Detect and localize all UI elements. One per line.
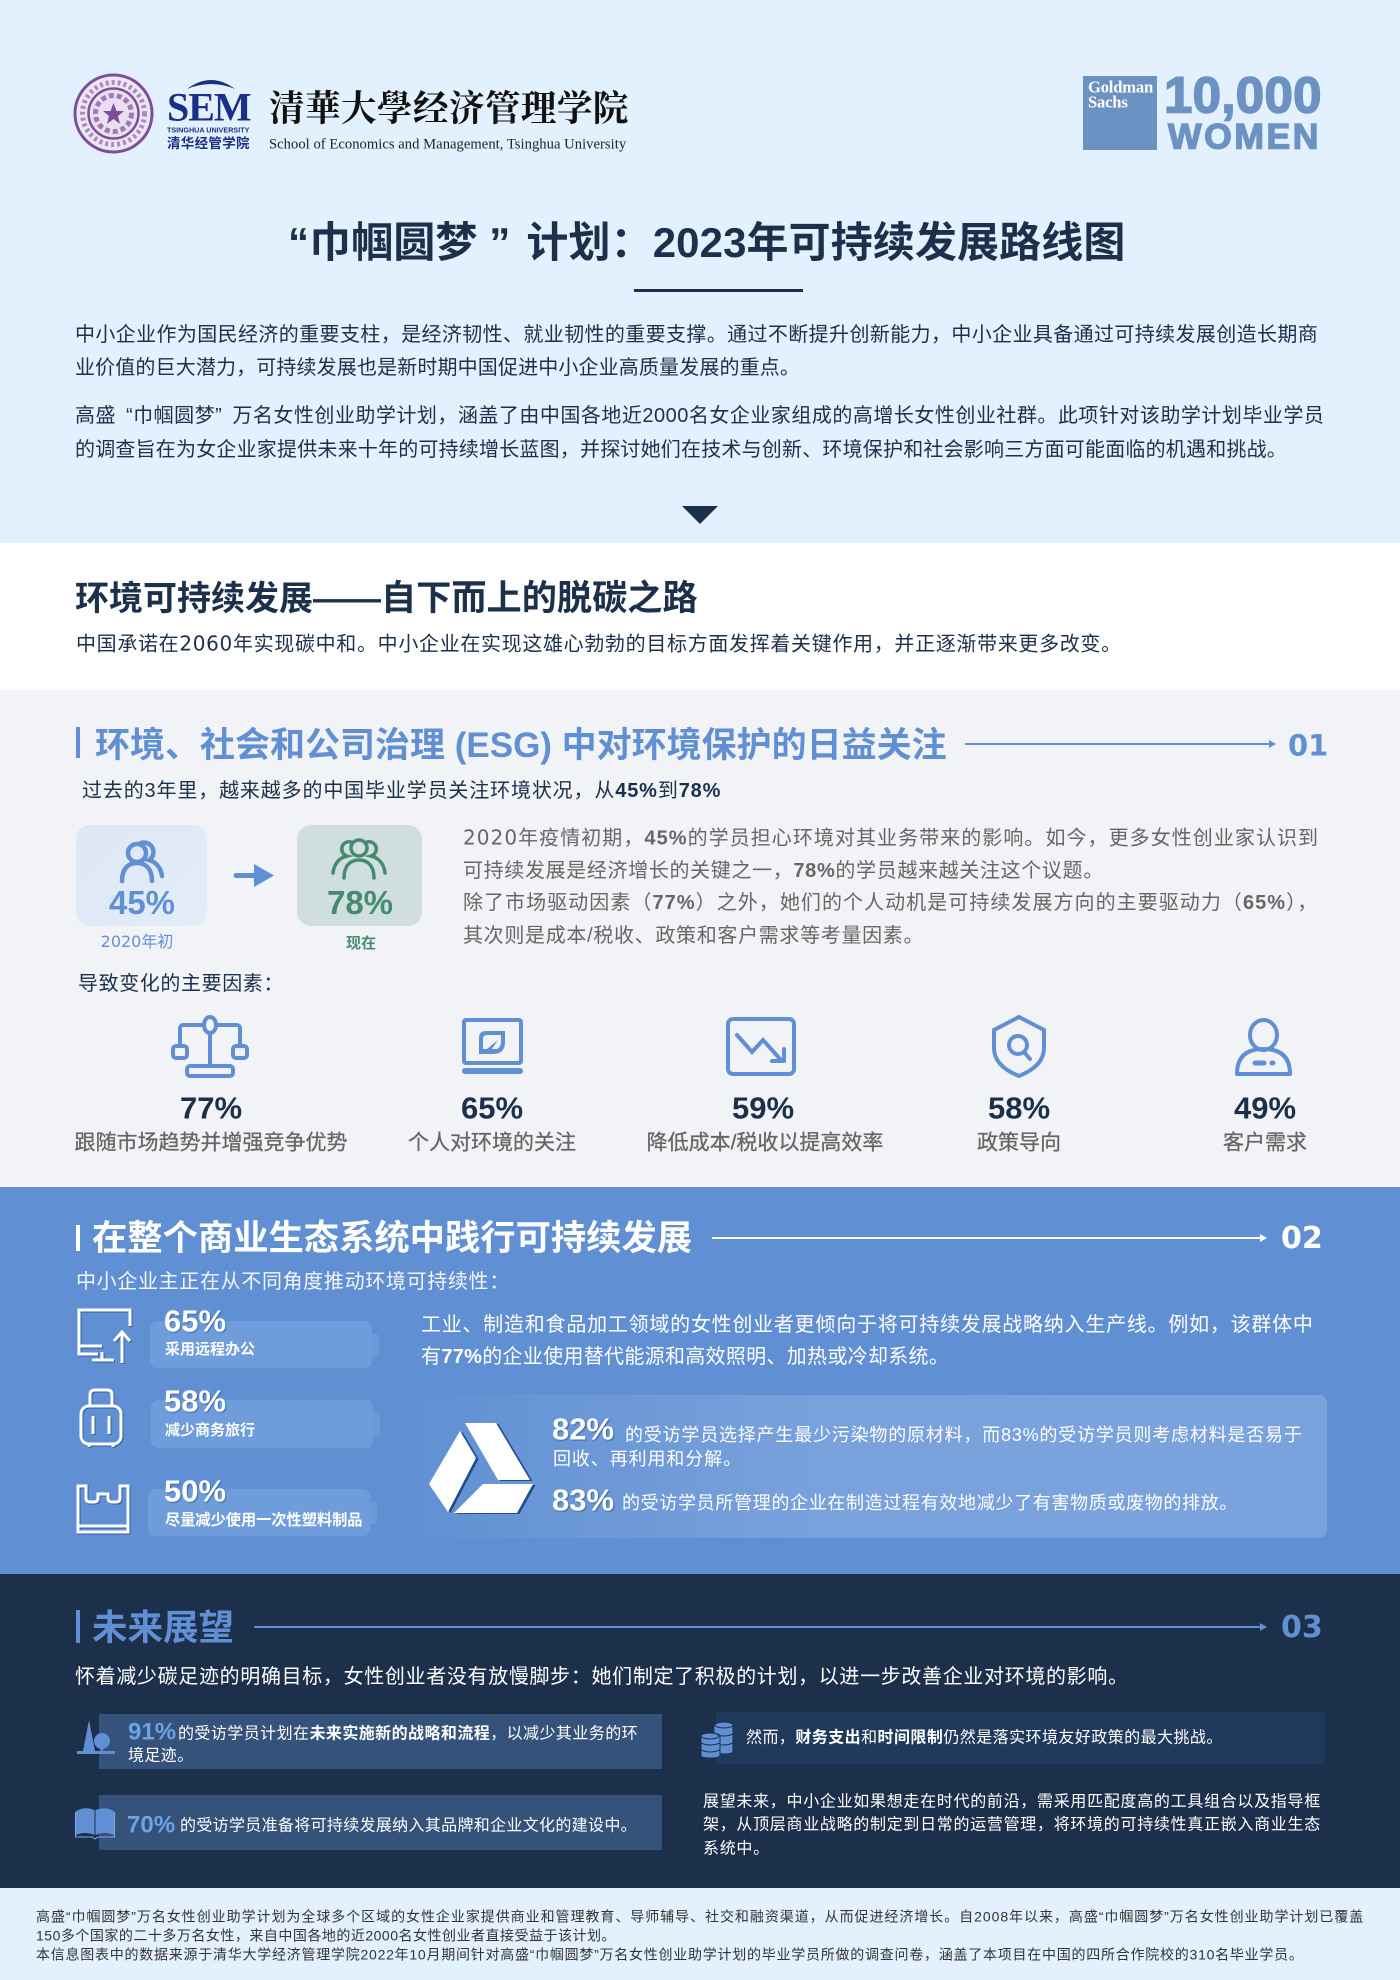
- value 78%: 78%: [327, 884, 393, 921]
- logo: Goldman Sachs 10,000 Women: WOMEN: [1168, 117, 1321, 157]
- logo: school name: School of Economics and Management, Tsinghua University: [269, 136, 626, 152]
- text: 然而，财务支出和时间限制仍然是落实环境友好政策的最大挑战。: [746, 1729, 1223, 1746]
- icon: laptop leaf: [462, 1018, 523, 1074]
- heading 02: 在整个商业生态系统中践行可持续发展: [92, 1219, 692, 1258]
- icon: shield: [992, 1014, 1046, 1078]
- intro paragraph 2: [75, 404, 1324, 461]
- number 03: 03: [1281, 1610, 1323, 1645]
- label: 跟随市场趋势并增强竞争优势: [74, 1131, 348, 1154]
- logo: school name: [269, 88, 629, 152]
- label: 减少商务旅行: [165, 1422, 255, 1439]
- icon: coin stacks: [700, 1721, 734, 1759]
- subheading: 中小企业主正在从不同角度推动环境可持续性：: [76, 1271, 510, 1293]
- icon: trees: [77, 1720, 115, 1754]
- value: 50%: [164, 1473, 226, 1508]
- value: 70%: [127, 1812, 175, 1839]
- paragraph: manufacturing: 有77%的企业使用替代能源和高效照明、加热或冷却系统。: [421, 1346, 949, 1368]
- subheading: 怀着减少碳足迹的明确目标，女性创业者没有放慢脚步：她们制定了积极的计划，以进一步改善企业对环境的影响。: [75, 1666, 1129, 1688]
- heading 01: 环境、社会和公司治理 (ESG) 中对环境保护的日益关注: [95, 726, 947, 765]
- label: 客户需求: [1223, 1131, 1307, 1154]
- paragraph: looking ahead: [703, 1789, 1328, 1861]
- heading: 环境可持续发展——自下而上的脱碳之路: [75, 579, 698, 618]
- callout: challenges: [701, 1712, 1325, 1764]
- text 83%: 的受访学员所管理的企业在制造过程有效地减少了有害物质或废物的排放。: [622, 1493, 1238, 1513]
- logo: Goldman Sachs 10,000 Women: 10,000: [1164, 66, 1322, 123]
- logo: Tsinghua seal: [74, 74, 154, 154]
- number 02: 02: [1281, 1221, 1323, 1256]
- note: programme description: 高盛“巾帼圆梦”万名女性创业助学计划为全球多个区域的女性企业家提供商业和管理教育、导师辅导、社交和融资渠道，从而促进经济增长。自2008年以来，高盛“巾帼圆梦”万名女性创业助学计划已覆盖: [36, 1909, 1364, 1925]
- callout: 91%: 境足迹。: [128, 1747, 194, 1764]
- label: 个人对环境的关注: [408, 1131, 576, 1154]
- number 01: 01: [1288, 729, 1328, 763]
- intro paragraph 2: 的调查旨在为女企业家提供未来十年的可持续增长蓝图，并探讨她们在技术与创新、环境保护和社会影响三方面可能面临的机遇和挑战。: [75, 439, 1287, 461]
- panel: header and introduction: [0, 0, 1400, 543]
- label: 政策导向: [977, 1131, 1061, 1154]
- subheading: 过去的3年里，越来越多的中国毕业学员关注环境状况，从45%到78%: [82, 780, 721, 802]
- label: 采用远程办公: [165, 1341, 255, 1358]
- paragraph: looking ahead: 架，从顶层商业战略的制定到日常的运营管理，将环境的可持续性真正嵌入商业生态: [703, 1816, 1321, 1833]
- callout: 70%: [75, 1795, 662, 1850]
- logo: SEM: TSINGHUA UNIVERSITY: [167, 126, 249, 135]
- paragraph: drivers explanation: [463, 826, 1319, 947]
- intro paragraph 1: [75, 324, 1318, 379]
- text 82%: 的受访学员选择产生最少污染物的原材料，而83%的受访学员则考虑材料是否易于: [625, 1425, 1303, 1445]
- text: 的受访学员准备将可持续发展纳入其品牌和企业文化的建设中。: [180, 1817, 637, 1834]
- logo: school name: 清華大學经济管理学院: [269, 88, 629, 128]
- logo: SEM: [167, 80, 251, 151]
- value: 49%: [1234, 1090, 1296, 1125]
- icon: down arrow: [682, 506, 718, 524]
- paragraph: drivers explanation: 其次则是成本/税收、政策和客户需求等考量因素。: [463, 925, 924, 947]
- note: programme reach: 150多个国家的二十多万名女性，来自中国各地的近2000名女性创业者直接受益于该计划。: [36, 1928, 616, 1944]
- panel: materials: [400, 1395, 1327, 1538]
- stat: remote work: [78, 1303, 379, 1368]
- panel: materials: 回收、再利用和分解。: [553, 1449, 742, 1469]
- stat: less plastic: [76, 1473, 377, 1536]
- value: 65%: [461, 1090, 523, 1125]
- logo: Goldman Sachs 10,000 Women: Sachs: [1088, 93, 1128, 112]
- paragraph: drivers explanation: 除了市场驱动因素（77%）之外，她们的个人动机是可持续发展方向的主要驱动力（65%），: [463, 892, 1318, 914]
- panel: environmental sustainability intro: [0, 543, 1400, 690]
- text: 的受访学员计划在未来实施新的战略和流程，以减少其业务的环: [178, 1725, 638, 1742]
- label: early 2020: 2020年初: [101, 932, 173, 951]
- icon: scales: [171, 1015, 249, 1078]
- paragraph: drivers explanation: 可持续发展是经济增长的关键之一，78%的学员越来越关注这个议题。: [463, 860, 1104, 882]
- stat 82%: 82%: [552, 1411, 614, 1446]
- icon: two people: [120, 840, 164, 884]
- value 45%: 45%: [109, 884, 175, 921]
- stat: 45%: [76, 825, 207, 926]
- value: 65%: [164, 1303, 226, 1338]
- panel: 02 business ecosystem: [0, 1187, 1400, 1574]
- paragraph: looking ahead: 展望未来，中小企业如果想走在时代的前沿，需采用匹配度高的工具组合以及指导框: [703, 1793, 1321, 1810]
- paragraph: manufacturing: 工业、制造和食品加工领域的女性创业者更倾向于将可持续发展战略纳入生产线。例如，该群体中: [421, 1314, 1314, 1336]
- panel: 01 ESG: [0, 690, 1400, 1187]
- intro paragraph 1: 业价值的巨大潜力，可持续发展也是新时期中国促进中小企业高质量发展的重点。: [75, 357, 800, 379]
- label: 尽量减少使用一次性塑料制品: [165, 1512, 362, 1529]
- value: 58%: [988, 1090, 1050, 1125]
- icon: book: [75, 1808, 115, 1840]
- label: 降低成本/税收以提高效率: [647, 1131, 883, 1154]
- factor: customer: [1223, 1018, 1307, 1154]
- value: 91%: [128, 1719, 176, 1746]
- factor: cost: [647, 1017, 883, 1154]
- icon: three people: [331, 838, 387, 880]
- stat 83%: 83%: [552, 1482, 614, 1517]
- logo: SEM: 清华经管学院: [167, 136, 250, 151]
- stat: less travel: [80, 1383, 380, 1448]
- paragraph: looking ahead: 系统中。: [703, 1840, 770, 1857]
- label: now: 现在: [346, 935, 376, 952]
- icon: plastic bag: [76, 1484, 130, 1534]
- value: 59%: [732, 1090, 794, 1125]
- factor: policy: [977, 1014, 1061, 1154]
- factor: personal concern: [408, 1018, 576, 1154]
- paragraph: manufacturing: [421, 1314, 1314, 1368]
- icon: arrow: [234, 864, 274, 887]
- title: “巾帼圆梦 ” 计划：2023年可持续发展路线图: [288, 219, 1125, 266]
- logo: Goldman Sachs 10,000 Women: [1083, 66, 1322, 157]
- icon: monitor: [78, 1308, 132, 1364]
- icon: person: [1235, 1018, 1292, 1076]
- factor: market: [74, 1015, 348, 1154]
- intro paragraph 1: 中小企业作为国民经济的重要支柱，是经济韧性、就业韧性的重要支撑。通过不断提升创新能力，中小企业具备通过可持续发展创造长期商: [75, 324, 1318, 346]
- note: data source: 本信息图表中的数据来源于清华大学经济管理学院2022年10月期间针对高盛“巾帼圆梦”万名女性创业助学计划的毕业学员所做的调查问卷，涵盖了本项目在中国的四所合作院校的310名毕业学员。: [36, 1947, 1304, 1963]
- intro paragraph 2: 高盛 “巾帼圆梦” 万名女性创业助学计划，涵盖了由中国各地近2000名女企业家组成的高增长女性创业社群。此项针对该助学计划毕业学员: [75, 405, 1324, 427]
- value: 77%: [180, 1090, 242, 1125]
- stat: 78%: [297, 825, 422, 926]
- callout: 91%: [77, 1714, 662, 1769]
- heading 03: 未来展望: [92, 1608, 234, 1648]
- value: 58%: [164, 1383, 226, 1418]
- subheading: 中国承诺在2060年实现碳中和。中小企业在实现这雄心勃勃的目标方面发挥着关键作用，并正逐渐带来更多改变。: [76, 632, 1122, 656]
- logo: Goldman Sachs 10,000 Women: Goldman: [1088, 78, 1153, 97]
- icon: luggage: [80, 1388, 124, 1448]
- panel: footer notes: [0, 1888, 1400, 1980]
- factors heading: 导致变化的主要因素：: [78, 973, 284, 995]
- panel: 03 outlook: [0, 1574, 1400, 1888]
- logo: SEM: SEM: [167, 84, 251, 130]
- icon: recycling triangle: [429, 1423, 536, 1514]
- icon: falling chart: [726, 1017, 796, 1076]
- paragraph: drivers explanation: 2020年疫情初期，45%的学员担心环境对其业务带来的影响。如今，更多女性创业家认识到: [463, 826, 1319, 850]
